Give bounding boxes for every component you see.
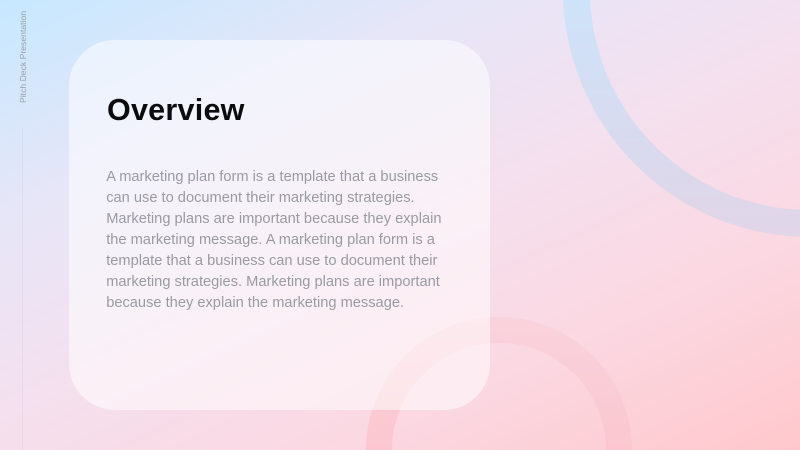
vertical rule	[22, 128, 23, 450]
body text: Marketing plans are important because they explain	[106, 211, 442, 227]
body text: the marketing message. A marketing plan form is a	[106, 232, 435, 248]
body text: because they explain the marketing message.	[106, 295, 404, 311]
panel: overview card	[69, 40, 490, 410]
body text	[106, 168, 442, 311]
ring: top right	[563, 0, 800, 237]
side label: Pitch Deck Presentation	[18, 11, 28, 103]
heading: Overview	[107, 93, 245, 127]
body text: can use to document their marketing strategies.	[106, 190, 415, 206]
body text: template that a business can use to document their	[106, 253, 437, 269]
body text: marketing strategies. Marketing plans are important	[106, 274, 440, 290]
body text: A marketing plan form is a template that a business	[106, 168, 438, 184]
ring: bottom centre	[366, 317, 632, 450]
